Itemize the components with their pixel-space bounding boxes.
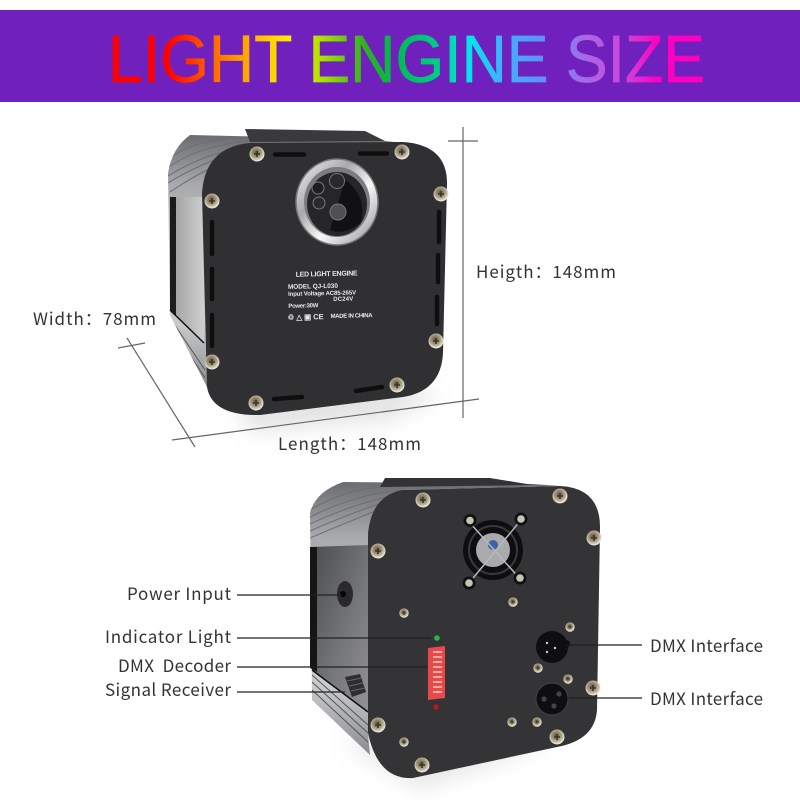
dimension lines [118, 127, 479, 447]
product label text: MADE IN CHINA [331, 313, 373, 320]
product label text: Power:30W [288, 303, 319, 310]
aluminium housing [310, 478, 560, 755]
label: height: Heigth：148mm [476, 258, 616, 283]
DIP switch [428, 646, 445, 700]
XLR male connector [536, 631, 570, 663]
product photo: front of light engine [167, 129, 448, 432]
callout: DMX interface top: DMX Interface [650, 632, 763, 657]
product label text: MODEL QJ-L030 [288, 283, 338, 291]
product label text: LED LIGHT ENGINE [296, 270, 358, 279]
power jack [337, 581, 353, 607]
label: length: Length：148mm [278, 430, 421, 455]
callout: DMX interface bottom: DMX Interface [650, 685, 763, 710]
callout: DMX decoder: DMX Decoder [118, 652, 231, 677]
callout leader lines [237, 595, 642, 698]
product label text: DC24V [333, 297, 353, 303]
back plate [368, 486, 600, 778]
callout: indicator light: Indicator Light [105, 623, 232, 648]
front plate [202, 142, 447, 415]
title banner [0, 10, 800, 102]
product label text: Input Voltage AC85-265V [288, 290, 356, 298]
lens connector [296, 159, 378, 245]
label: width: Width：78mm [33, 305, 156, 330]
ventilation slots [212, 154, 439, 399]
aluminium housing [167, 129, 403, 387]
signal receiver [345, 674, 366, 697]
screws [370, 488, 602, 772]
product photo: back of light engine [310, 478, 602, 790]
screws [204, 144, 448, 410]
callout: power input: Power Input [127, 580, 232, 605]
product label text [287, 270, 373, 322]
XLR female connector [536, 683, 568, 715]
product label text: ♲ △ ▣ CE [287, 312, 324, 322]
indicator LEDs [433, 635, 440, 710]
callout: signal receiver: Signal Receiver [105, 676, 231, 701]
title text: LIGHT ENGINE SIZE [108, 22, 705, 97]
cooling fan [462, 512, 528, 590]
